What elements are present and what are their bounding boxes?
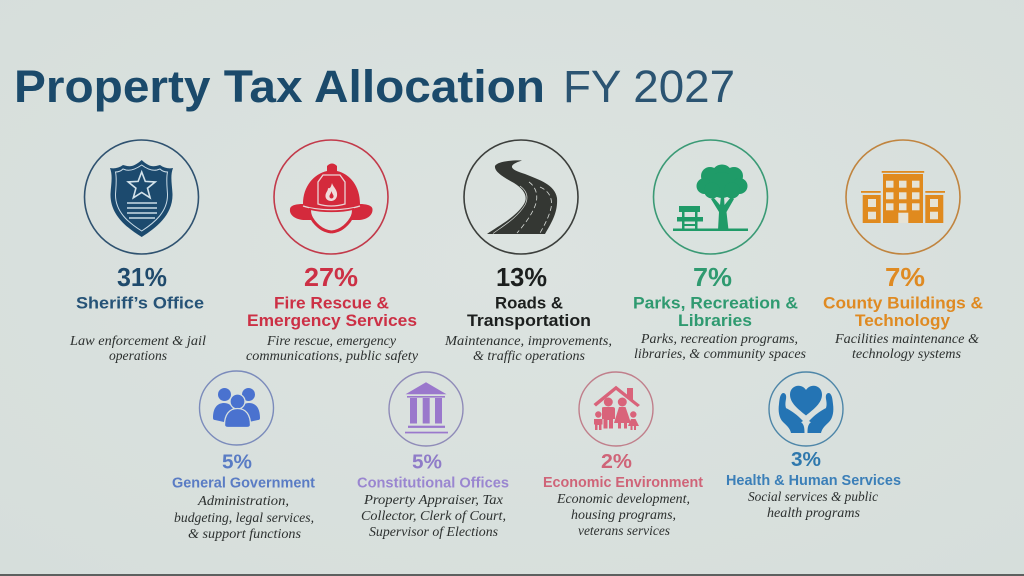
panel: Roads & Transportation bbox=[444, 140, 612, 364]
description bbox=[556, 492, 690, 539]
panel: Parks, Recreation & Libraries bbox=[633, 140, 807, 362]
icon: hands holding heart bbox=[769, 372, 843, 446]
percentage: 31% bbox=[117, 262, 167, 292]
heading: Constitutional Offices bbox=[357, 475, 509, 491]
description: Law enforcement & jail bbox=[69, 334, 206, 349]
title bbox=[14, 61, 735, 112]
description: Property Appraiser, Tax bbox=[363, 493, 504, 508]
percentage: 27% bbox=[304, 262, 358, 292]
panel: Fire Rescue & Emergency Services bbox=[246, 140, 419, 364]
icon: people group bbox=[200, 371, 274, 445]
percentage: 5% bbox=[222, 450, 252, 474]
description: Facilities maintenance & bbox=[834, 332, 979, 347]
description: & traffic operations bbox=[473, 349, 586, 364]
icon: buildings bbox=[846, 140, 960, 254]
description bbox=[69, 334, 206, 364]
description: Administration, bbox=[197, 494, 289, 509]
panel: General Government bbox=[172, 371, 315, 542]
description bbox=[748, 490, 879, 521]
heading bbox=[633, 294, 798, 330]
icon: fire helmet bbox=[274, 140, 388, 254]
description bbox=[246, 334, 419, 364]
percentage: 3% bbox=[791, 448, 821, 471]
heading: Economic Environment bbox=[543, 475, 703, 491]
heading: Emergency Services bbox=[247, 311, 417, 330]
description: operations bbox=[109, 349, 168, 364]
description: veterans services bbox=[578, 524, 671, 539]
panel: Constitutional Offices bbox=[357, 372, 509, 540]
description: health programs bbox=[767, 506, 861, 521]
percentage: 5% bbox=[412, 450, 442, 474]
heading: Health & Human Services bbox=[726, 473, 901, 489]
description: communications, public safety bbox=[246, 349, 419, 364]
description: Economic development, bbox=[556, 492, 690, 507]
description: Parks, recreation programs, bbox=[640, 332, 798, 347]
heading: Libraries bbox=[678, 311, 752, 330]
description: libraries, & community spaces bbox=[634, 347, 807, 362]
percentage: 2% bbox=[601, 450, 632, 473]
heading: Transportation bbox=[467, 311, 591, 330]
description: Supervisor of Elections bbox=[369, 525, 499, 540]
description: Social services & public bbox=[748, 490, 879, 505]
description bbox=[444, 334, 612, 364]
panel: County Buildings & Technology bbox=[823, 140, 983, 362]
description: Collector, Clerk of Court, bbox=[361, 509, 506, 524]
icon: government building bbox=[389, 372, 463, 446]
description bbox=[361, 493, 506, 540]
description bbox=[834, 332, 979, 362]
panel: Sheriff's Office bbox=[69, 140, 206, 364]
icon: tree and bench bbox=[654, 140, 768, 254]
heading: Roads & bbox=[495, 294, 563, 312]
description bbox=[634, 332, 807, 362]
icon: police badge bbox=[84, 140, 198, 254]
description: Fire rescue, emergency bbox=[266, 334, 397, 349]
title: Property Tax Allocation bbox=[14, 61, 545, 112]
description: Maintenance, improvements, bbox=[444, 334, 612, 349]
icon: winding road bbox=[464, 140, 578, 254]
heading: Technology bbox=[855, 311, 951, 330]
panel: Health & Human Services bbox=[726, 372, 901, 521]
heading bbox=[823, 294, 983, 330]
heading: General Government bbox=[172, 475, 315, 491]
description bbox=[174, 494, 314, 542]
description: technology systems bbox=[852, 347, 962, 362]
title: FY 2027 bbox=[563, 61, 735, 112]
heading: Parks, Recreation & bbox=[633, 294, 798, 312]
description: budgeting, legal services, bbox=[174, 511, 314, 526]
heading bbox=[247, 294, 417, 330]
percentage: 13% bbox=[496, 262, 547, 292]
panel: Economic Environment bbox=[543, 372, 703, 539]
percentage: 7% bbox=[693, 262, 732, 292]
description: & support functions bbox=[188, 527, 302, 542]
heading: County Buildings & bbox=[823, 294, 983, 312]
heading: Sheriff’s Office bbox=[76, 294, 204, 312]
heading bbox=[467, 294, 591, 330]
percentage: 7% bbox=[885, 262, 925, 292]
description: housing programs, bbox=[571, 508, 676, 523]
heading: Fire Rescue & bbox=[274, 294, 389, 312]
icon: house and family bbox=[579, 372, 653, 446]
